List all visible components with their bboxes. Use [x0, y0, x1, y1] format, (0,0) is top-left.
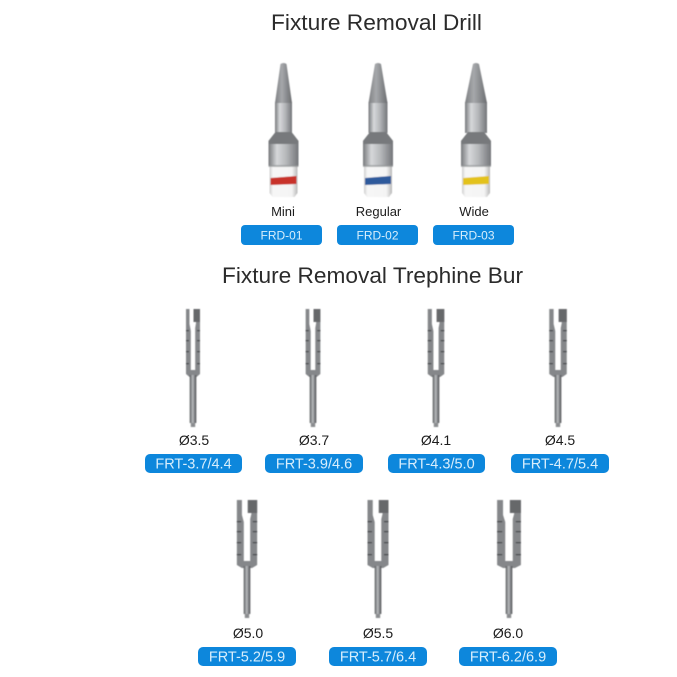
- pill: FRD-02: FRD-02: [356, 228, 399, 242]
- pill: FRT-4.3/5.0: [388, 454, 485, 473]
- drill tip: [465, 63, 487, 103]
- drill tip: [368, 63, 388, 103]
- pill: FRD-01: [241, 225, 322, 245]
- pill: FRT-4.7/5.4: [511, 454, 609, 473]
- size label: 4.5: Ø4.5: [545, 432, 575, 448]
- size label: 6.0: Ø6.0: [493, 625, 523, 641]
- bur: 4.1: [428, 309, 444, 427]
- bur: 3.7: [306, 309, 320, 427]
- pill: FRT-3.7/4.4: FRT-3.7/4.4: [155, 456, 232, 472]
- title: Fixture Removal Drill: Fixture Removal Drill: [271, 10, 482, 35]
- pill: FRT-3.7/4.4: [145, 454, 242, 473]
- pill: FRT-3.9/4.6: FRT-3.9/4.6: [276, 456, 352, 472]
- bur: 6.0: [497, 500, 521, 618]
- pill: FRD-02: [337, 225, 418, 245]
- size label: 3.5: Ø3.5: [179, 432, 209, 448]
- colour band: blue: [365, 176, 391, 185]
- pill: FRT-3.9/4.6: [265, 454, 363, 473]
- drill: Regular: [363, 63, 393, 197]
- title: Fixture Removal Trephine Bur: Fixture Removal Trephine Bur: [222, 263, 523, 288]
- size label: 3.7: Ø3.7: [299, 432, 329, 448]
- bur: 4.5: [549, 309, 567, 427]
- pill: FRT-6.2/6.9: FRT-6.2/6.9: [470, 650, 546, 666]
- pill: FRD-03: [433, 225, 514, 245]
- colour band: yellow: [463, 176, 489, 185]
- pill: FRT-4.3/5.0: FRT-4.3/5.0: [398, 456, 475, 472]
- size label: 4.1: Ø4.1: [421, 432, 451, 448]
- label: Regular: Regular: [356, 204, 402, 219]
- drill tip: [275, 63, 292, 103]
- colour band: red: [270, 176, 296, 185]
- pill: FRT-5.2/5.9: [198, 647, 296, 666]
- pill: FRT-5.7/6.4: [329, 647, 427, 666]
- pill: FRT-6.2/6.9: [459, 647, 557, 666]
- bur: 5.5: [368, 500, 388, 618]
- pill: FRT-5.7/6.4: FRT-5.7/6.4: [340, 650, 416, 666]
- size label: 5.5: Ø5.5: [363, 625, 393, 641]
- drill: Mini: [268, 63, 298, 197]
- pill: FRT-4.7/5.4: FRT-4.7/5.4: [522, 456, 598, 472]
- size label: 5.0: Ø5.0: [233, 625, 263, 641]
- pill: FRD-03: FRD-03: [452, 228, 495, 242]
- pill: FRT-5.2/5.9: FRT-5.2/5.9: [209, 650, 285, 666]
- bur: 3.5: [186, 309, 200, 427]
- bur: 5.0: [237, 500, 257, 618]
- label: Wide: Wide: [459, 204, 489, 219]
- label: Mini: Mini: [271, 204, 295, 219]
- pill: FRD-01: FRD-01: [260, 228, 303, 242]
- drill: Wide: [461, 63, 491, 197]
